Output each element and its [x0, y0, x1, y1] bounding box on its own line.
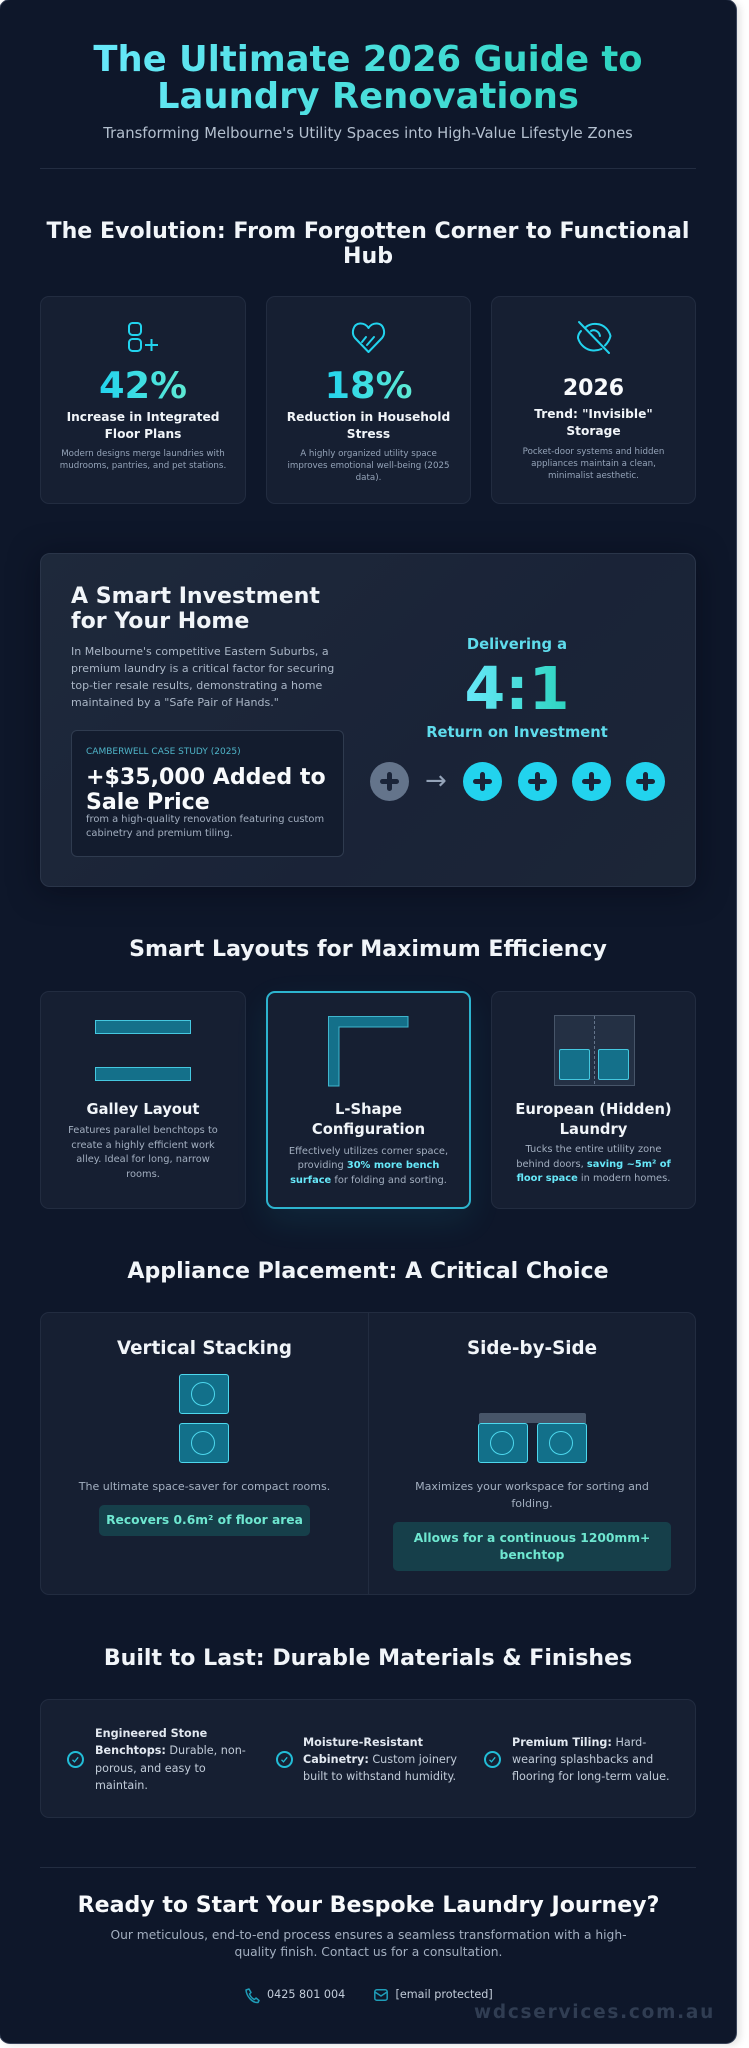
callout: Recovers 0.6m² of floor area — [106, 1513, 303, 1527]
icon: floor plans — [128, 322, 158, 352]
value added: Sale Price — [86, 790, 210, 814]
label: Trend: "Invisible" — [534, 407, 653, 421]
panel: L-shape configuration — [266, 991, 471, 1209]
label: Reduction in Household — [287, 410, 450, 424]
item: premium tiling — [484, 1736, 670, 1783]
item text: porous, and easy to — [95, 1762, 206, 1775]
layout description: Effectively utilizes corner space, — [289, 1146, 448, 1156]
diagram: L-shape — [328, 1016, 408, 1086]
description: A highly organized utility space — [300, 448, 437, 458]
item text: wearing splashbacks and — [512, 1753, 653, 1766]
layout description: providing 30% more bench — [298, 1160, 439, 1171]
item text: flooring for long-term value. — [512, 1770, 670, 1783]
heading: materials: Built to Last: Durable Materials & Finishes — [104, 1646, 632, 1671]
label: Floor Plans — [105, 427, 181, 441]
layout description — [289, 1146, 448, 1186]
description: The ultimate space-saver for compact rooms. — [79, 1480, 330, 1493]
description: minimalist aesthetic. — [548, 471, 639, 481]
icon: eye off — [577, 321, 612, 354]
description: Modern designs merge laundries with — [61, 448, 225, 458]
case study label: CAMBERWELL CASE STUDY (2025) — [86, 747, 241, 757]
label: Stress — [347, 427, 390, 441]
description: data). — [356, 473, 381, 483]
panel: appliance placement — [40, 1312, 696, 1595]
description: improves emotional well-being (2025 — [287, 461, 450, 471]
icon: check — [484, 1751, 501, 1768]
item text — [303, 1736, 457, 1783]
panel: stress stat — [266, 296, 471, 504]
label — [287, 410, 450, 441]
stat: 42%: 42% — [99, 364, 187, 407]
value added — [86, 764, 326, 814]
heading: evolution: The Evolution: From Forgotten Corner to Functional — [47, 219, 689, 244]
layout description: rooms. — [126, 1169, 160, 1180]
item text: Moisture-Resistant — [303, 1736, 423, 1748]
icon: cyan plus 2 — [518, 762, 557, 801]
item text: Benchtops: Durable, non- — [95, 1744, 246, 1757]
investment paragraph: maintained by a "Safe Pair of Hands." — [71, 696, 279, 709]
subtitle: Transforming Melbourne's Utility Spaces into High-Value Lifestyle Zones — [103, 125, 633, 142]
title — [93, 38, 643, 116]
icon: phone — [245, 1988, 260, 2003]
arrow: → — [425, 766, 447, 796]
heading: evolution: Hub — [343, 244, 393, 269]
layout description: surface for folding and sorting. — [290, 1175, 447, 1186]
heading: appliances: Appliance Placement: A Critical Choice — [127, 1259, 609, 1284]
description: Maximizes your workspace for sorting and — [415, 1480, 649, 1493]
panel: invisible storage trend — [491, 296, 696, 504]
heading: investment: for Your Home — [71, 608, 249, 634]
layout description: create a highly efficient work — [71, 1140, 215, 1151]
diagram: galley — [95, 1020, 191, 1081]
icon: grey plus — [370, 762, 409, 801]
icon: check — [67, 1751, 84, 1768]
icon: cyan plus 1 — [463, 762, 502, 801]
heading: call to action: Ready to Start Your Bespoke Laundry Journey? — [78, 1893, 659, 1918]
label — [67, 410, 219, 441]
case study description: cabinetry and premium tiling. — [86, 828, 233, 839]
call to action text: quality finish. Contact us for a consultation. — [235, 1945, 502, 1959]
item text: Premium Tiling: Hard- — [512, 1736, 646, 1748]
item text: maintain. — [95, 1779, 148, 1792]
label: Increase in Integrated — [67, 410, 219, 424]
layout title: L-Shape — [335, 1101, 402, 1118]
value added: +$35,000 Added to — [86, 764, 326, 790]
description: folding. — [511, 1497, 553, 1510]
investment paragraph — [71, 644, 334, 709]
layout title: Galley Layout — [87, 1101, 199, 1118]
panel: galley layout — [40, 991, 246, 1209]
description: appliances maintain a clean, — [531, 459, 656, 469]
call to action text: Our meticulous, end-to-end process ensures a seamless transformation with a high- — [110, 1928, 627, 1942]
vertical stacking column — [78, 1338, 330, 1536]
item text: built to withstand humidity. — [303, 1770, 456, 1783]
layout description: floor space in modern homes. — [517, 1173, 670, 1184]
investment paragraph: In Melbourne's competitive Eastern Suburbs, a — [71, 644, 329, 658]
description: mudrooms, pantries, and pet stations. — [60, 461, 226, 471]
icon: cyan plus 3 — [572, 762, 611, 801]
side-by-side column — [393, 1338, 671, 1571]
layout title: Laundry — [560, 1121, 627, 1138]
panel: European laundry — [491, 991, 696, 1209]
icon: stacked machines — [179, 1374, 229, 1463]
icon row: one becomes four — [370, 762, 665, 801]
description: Pocket-door systems and hidden — [523, 446, 664, 456]
investment paragraph: premium laundry is a critical factor for securing — [71, 662, 334, 675]
label: Storage — [566, 424, 621, 438]
item text: Engineered Stone — [95, 1727, 207, 1740]
column title: Vertical Stacking — [117, 1338, 292, 1359]
diagram: hidden laundry — [554, 1015, 635, 1086]
heading: evolution — [46, 219, 689, 269]
call to action text — [0, 1927, 737, 1961]
contact: phone — [245, 1986, 345, 2004]
email text: [email protected] — [396, 1988, 493, 2001]
layout description: Tucks the entire utility zone — [526, 1144, 661, 1155]
item text: Cabinetry: Custom joinery — [303, 1753, 457, 1766]
column title: Side-by-Side — [467, 1338, 597, 1359]
icon: cyan plus 4 — [626, 762, 665, 801]
description — [60, 448, 226, 471]
layout title: Configuration — [312, 1121, 425, 1138]
ROI ratio: 4:1 — [464, 655, 569, 723]
item: moisture resistant cabinetry — [276, 1736, 457, 1783]
description — [415, 1480, 649, 1510]
callout: benchtop — [500, 1548, 564, 1562]
layout title: European (Hidden) — [515, 1101, 672, 1118]
layout description — [68, 1125, 218, 1180]
callout: Allows for a continuous 1200mm+ — [414, 1531, 650, 1545]
panel: materials — [40, 1699, 696, 1818]
icon: side-by-side machines — [478, 1413, 587, 1463]
callout — [99, 1505, 310, 1536]
panel: smart investment — [40, 553, 696, 887]
contact: email — [374, 1986, 494, 2004]
description — [523, 446, 664, 481]
icon: heart — [352, 322, 386, 353]
description — [287, 448, 450, 483]
title: Laundry Renovations — [157, 76, 579, 116]
heading: layouts: Smart Layouts for Maximum Efficiency — [129, 937, 607, 962]
icon: envelope — [374, 1989, 388, 2001]
case study description: from a high-quality renovation featuring custom — [86, 814, 324, 824]
ROI label bottom: Return on Investment — [426, 724, 608, 741]
icon: check — [276, 1751, 293, 1768]
investment paragraph: top-tier resale results, demonstrating a home — [71, 679, 322, 692]
year: 2026: 2026 — [563, 376, 624, 401]
panel: floor plans stat — [40, 296, 246, 504]
heading: investment — [71, 584, 320, 634]
item: engineered stone — [67, 1727, 246, 1792]
title: The Ultimate 2026 Guide to — [93, 38, 643, 80]
layout title — [515, 1101, 672, 1138]
item text — [95, 1727, 246, 1792]
callout — [393, 1522, 671, 1571]
layout description: alley. Ideal for long, narrow — [76, 1154, 210, 1165]
case study description — [86, 814, 324, 839]
heading: investment: A Smart Investment — [71, 584, 320, 608]
layout description: behind doors, saving ~5m² of — [516, 1159, 671, 1170]
layout description: Features parallel benchtops to — [68, 1125, 218, 1136]
case study box — [71, 730, 344, 857]
layout description — [516, 1144, 671, 1184]
phone number: 0425 801 004 — [267, 1988, 345, 2001]
watermark: wdcservices.com.au — [474, 2002, 715, 2023]
ROI label top: Delivering a — [467, 636, 567, 653]
stat: 18%: 18% — [324, 364, 413, 407]
item text — [512, 1736, 670, 1783]
layout title — [312, 1101, 425, 1138]
label — [534, 407, 653, 438]
